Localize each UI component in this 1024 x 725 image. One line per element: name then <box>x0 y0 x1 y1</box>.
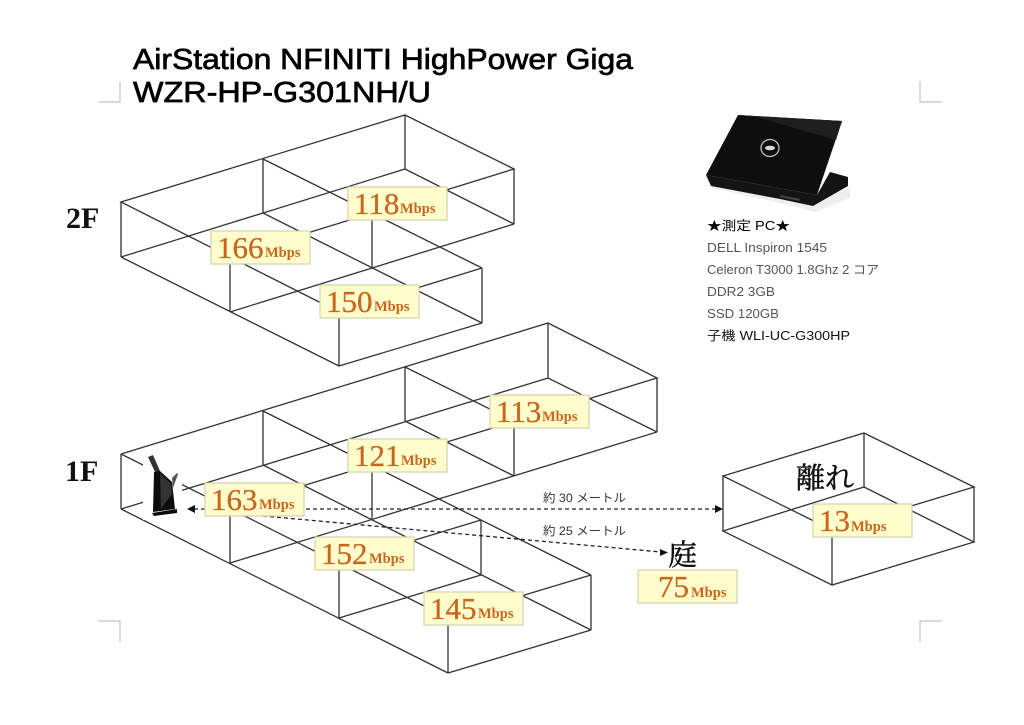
speed: 145 Mbps: Mbps <box>478 606 514 622</box>
floor label: 2F: 2F <box>66 202 99 235</box>
annex heading: 離れ <box>796 462 854 495</box>
icon: laptop <box>706 115 850 212</box>
speed: 75 Mbps: 75 <box>658 569 689 604</box>
speed: 150 Mbps <box>320 284 419 319</box>
speed: 150 Mbps: Mbps <box>374 299 410 315</box>
title <box>133 44 634 109</box>
text block: test PC specification: Celeron T3000 1.8Ghz 2 コア <box>707 263 879 277</box>
text block: test PC specification: DELL Inspiron 1545 <box>707 241 827 255</box>
text block: test PC specification: 子機 WLI-UC-G300HP <box>707 329 850 343</box>
speed: 118 Mbps <box>348 186 447 221</box>
speed: 166 Mbps <box>211 230 310 265</box>
speed: 152 Mbps: 152 <box>321 536 368 571</box>
speed: 13 Mbps: 13 <box>819 503 850 538</box>
text block: test PC specification: ★測定 PC★ <box>707 219 791 233</box>
wireframe: 2F rooms <box>121 115 514 366</box>
speed: 13 Mbps <box>813 503 912 538</box>
speed: 121 Mbps: Mbps <box>401 453 437 469</box>
text block: test PC specification: DDR2 3GB <box>707 285 775 299</box>
speed: 163 Mbps: Mbps <box>259 497 295 513</box>
speed: 145 Mbps <box>424 591 523 626</box>
speed: 166 Mbps: Mbps <box>265 245 301 261</box>
speed: 113 Mbps: 113 <box>496 394 541 429</box>
speed: 113 Mbps <box>490 394 589 429</box>
text block: test PC specification <box>707 219 879 343</box>
speed: 150 Mbps: 150 <box>326 284 372 319</box>
label: about 25 metres: 約 25 メートル <box>543 523 626 538</box>
speed: 152 Mbps <box>315 536 414 571</box>
text block: test PC specification: SSD 120GB <box>707 307 779 321</box>
wireframe: 1F rooms <box>121 323 657 673</box>
label: about 30 metres: 約 30 メートル <box>543 490 626 505</box>
speed: 163 Mbps: 163 <box>211 482 258 517</box>
speed: 75 Mbps: Mbps <box>691 585 727 601</box>
floor label: 1F: 1F <box>65 455 98 488</box>
speed: 152 Mbps: Mbps <box>369 551 405 567</box>
title: WZR-HP-G301NH/U <box>133 77 431 109</box>
speed: 163 Mbps <box>205 482 304 517</box>
speed: 121 Mbps: 121 <box>354 438 400 473</box>
arrow: router to garden, about 25 metres <box>263 516 668 556</box>
arrow: router to annex, about 30 metres <box>187 505 723 513</box>
speed: 118 Mbps: Mbps <box>400 201 436 217</box>
speed: 75 Mbps <box>638 569 737 604</box>
icon: wireless router <box>143 452 182 520</box>
title: AirStation NFINITI HighPower Giga <box>133 44 634 76</box>
speed: 145 Mbps: 145 <box>430 591 476 626</box>
speed: 113 Mbps: Mbps <box>542 409 578 425</box>
crop marks <box>98 81 942 642</box>
speed: 118 Mbps: 118 <box>354 186 399 221</box>
speed: 121 Mbps <box>348 438 447 473</box>
garden heading: 庭 <box>668 539 697 572</box>
wireframe: annex room <box>723 433 974 585</box>
speed: 166 Mbps: 166 <box>217 230 264 265</box>
speed: 13 Mbps: Mbps <box>851 519 887 535</box>
